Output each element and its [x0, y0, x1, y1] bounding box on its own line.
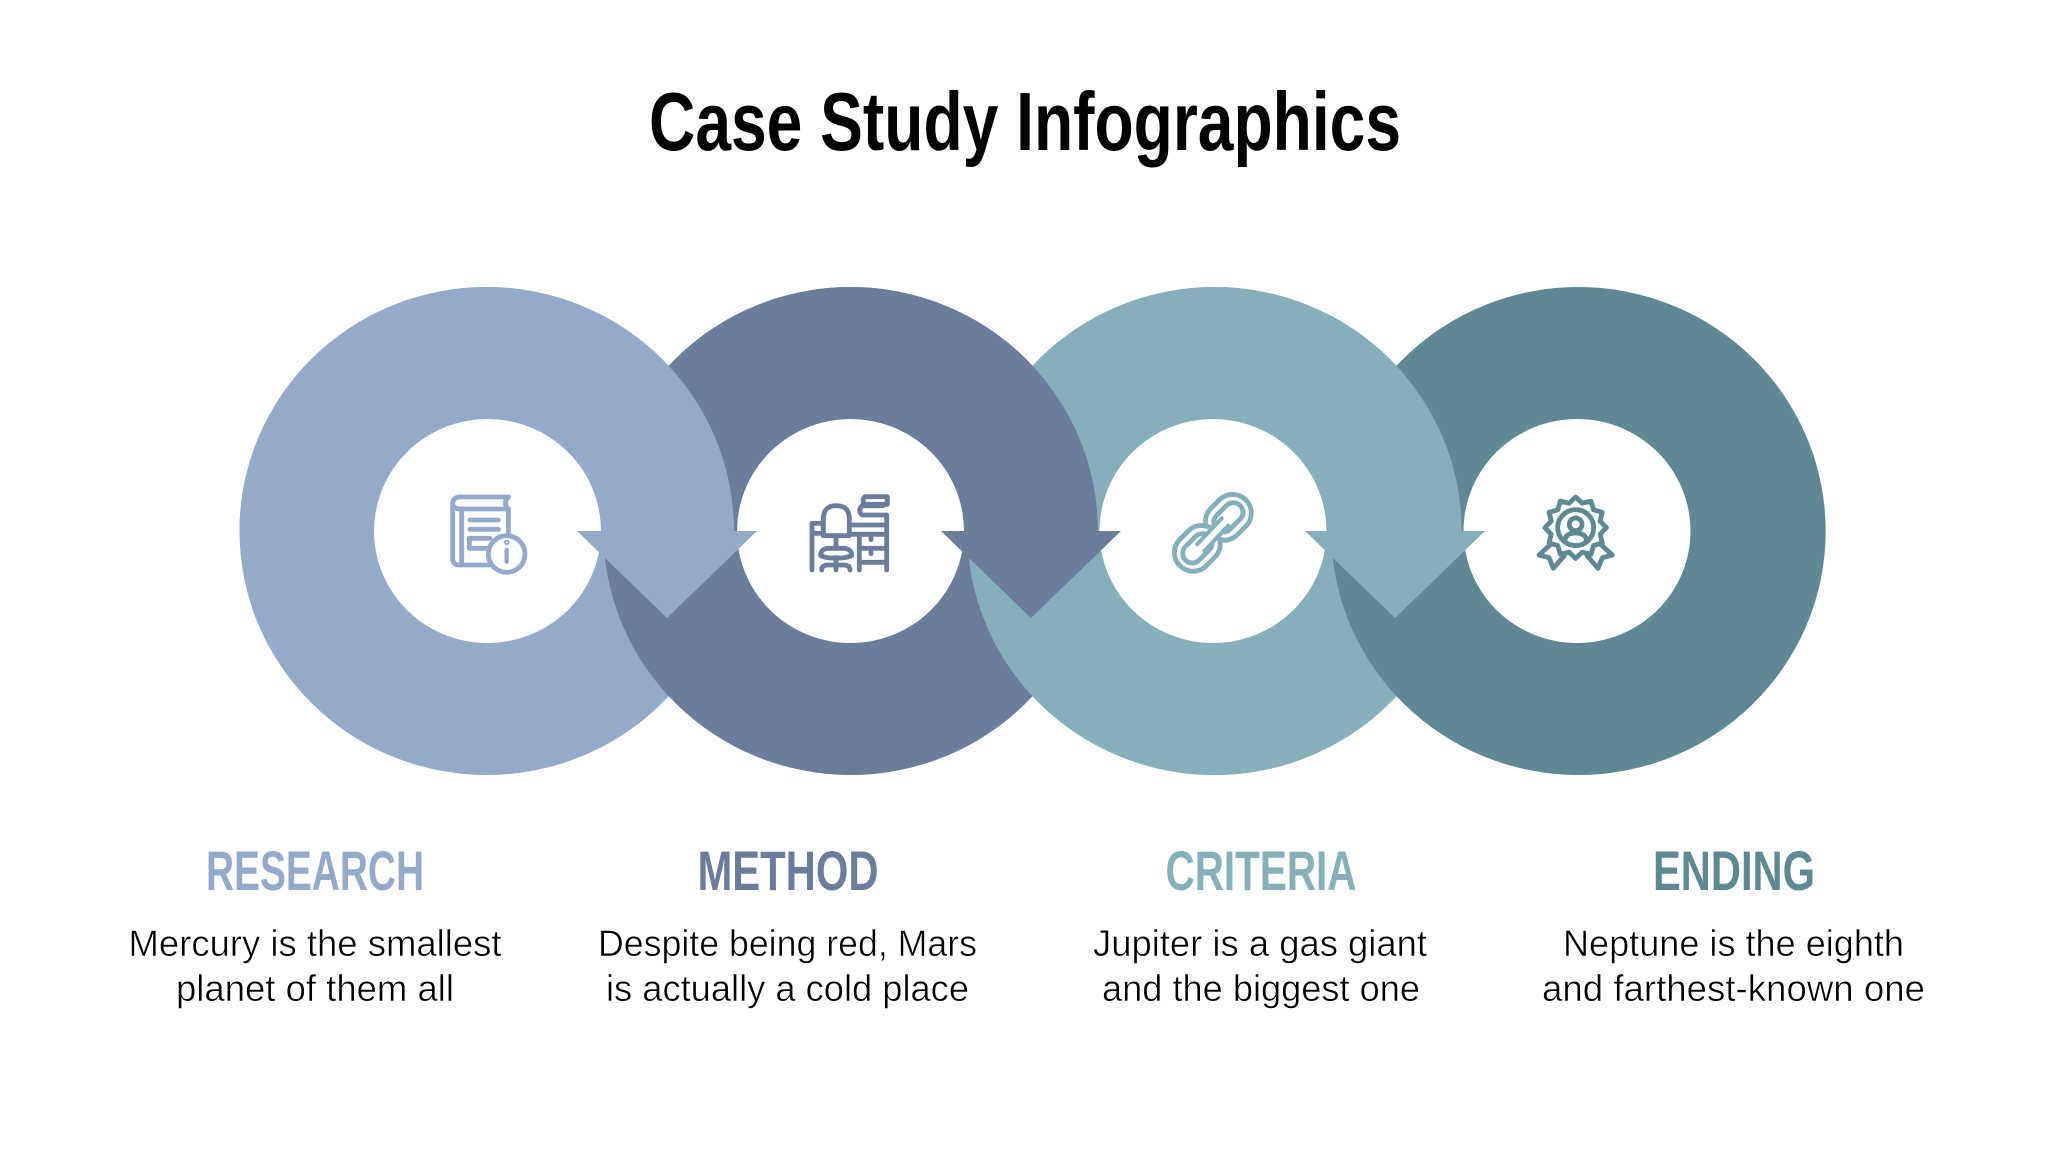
heading: method: METHOD: [698, 839, 878, 902]
description: ending: [1542, 923, 1925, 1009]
arrow: method to criteria: [941, 531, 1121, 618]
text block: research: [128, 839, 502, 1009]
description: criteria: Jupiter is a gas giant: [1093, 923, 1428, 964]
text block: method: [598, 839, 977, 1009]
ring 2: method: [603, 287, 1098, 775]
ring 3: criteria: [967, 287, 1462, 775]
heading: research: RESEARCH: [206, 839, 424, 902]
ring 2 upper overlap: [668, 287, 1098, 531]
description: criteria: and the biggest one: [1102, 968, 1420, 1009]
arrow: research to method: [577, 531, 757, 618]
description: method: is actually a cold place: [606, 968, 969, 1009]
text block: criteria: [1093, 839, 1428, 1009]
ring 1 upper overlap: [240, 287, 734, 531]
ring 3 upper overlap: [1032, 287, 1462, 531]
heading: ending: ENDING: [1653, 839, 1815, 902]
ring 4: ending: [1331, 287, 1826, 775]
description: research: planet of them all: [176, 968, 454, 1009]
description: research: Mercury is the smallest: [128, 923, 502, 964]
icon: desk with chair and books: [812, 497, 887, 570]
heading: criteria: CRITERIA: [1166, 839, 1356, 902]
icon: chain link: [1167, 487, 1259, 579]
description: criteria: [1093, 923, 1428, 1009]
description: ending: Neptune is the eighth: [1563, 923, 1904, 964]
description: research: [128, 923, 502, 1009]
description: method: Despite being red, Mars: [598, 923, 977, 964]
arrow: criteria to ending: [1305, 531, 1485, 618]
ring 1: research: [240, 287, 734, 775]
interlocking circles chain: [240, 287, 1826, 775]
icon: award badge: [1539, 497, 1612, 568]
text block: ending: [1542, 839, 1925, 1009]
icon: book with info badge: [453, 497, 525, 572]
description: ending: and farthest-known one: [1542, 968, 1925, 1009]
title: Case Study Infographics: [649, 75, 1401, 168]
description: method: [598, 923, 977, 1009]
